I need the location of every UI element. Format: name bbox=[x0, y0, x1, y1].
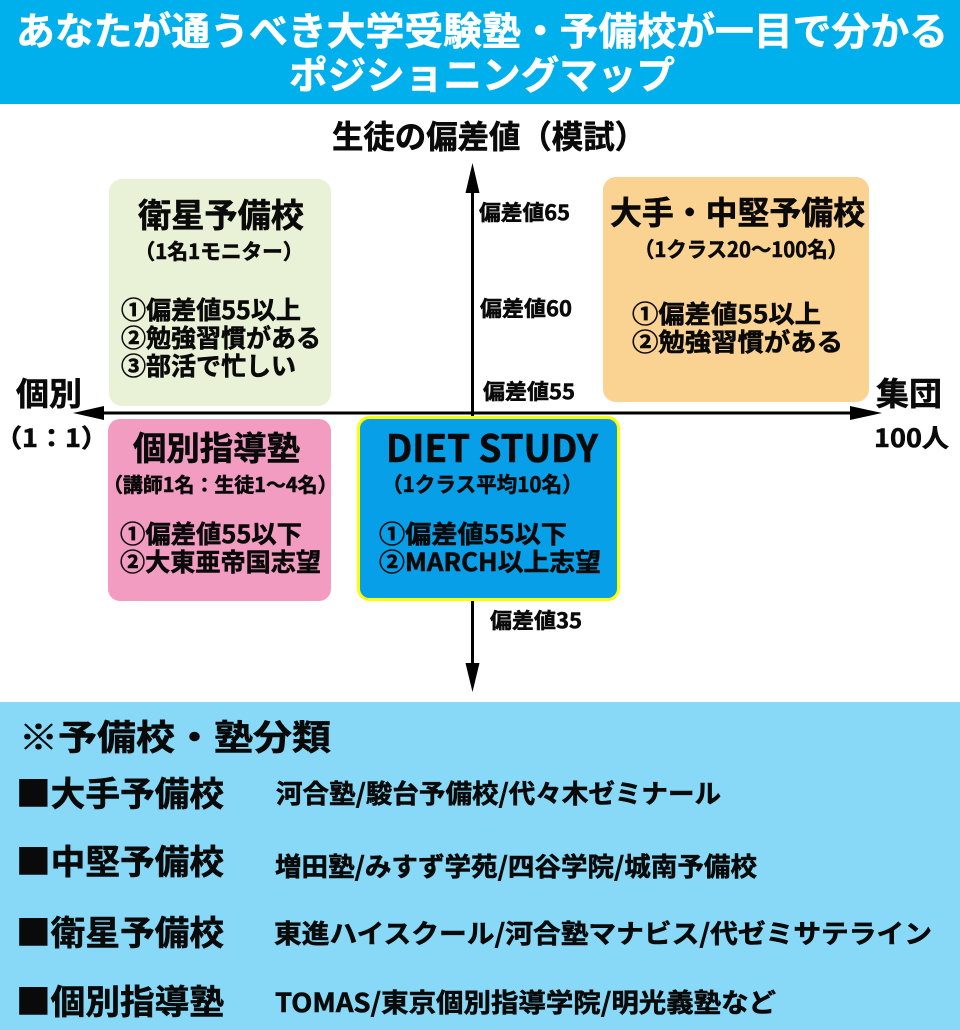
panel: major and mid-size prep schools: （1クラス20～100名） bbox=[634, 234, 848, 264]
panel: DIET STUDY: ②MARCH以上志望 bbox=[379, 543, 601, 579]
deviation scale labels: 偏差値55 bbox=[483, 376, 575, 406]
panel: DIET STUDY bbox=[358, 418, 618, 600]
row: individual tutoring schools bbox=[16, 975, 776, 1024]
row: major prep schools bbox=[16, 767, 721, 816]
panel: individual tutoring: ②大東亜帝国志望 bbox=[120, 543, 321, 579]
row: major prep schools: 河合塾/駿台予備校/代々木ゼミナール bbox=[276, 774, 721, 811]
row: mid-size prep schools bbox=[16, 835, 757, 884]
panel: individual tutoring: 個別指導塾 bbox=[133, 422, 300, 470]
panel: major and mid-size prep schools bbox=[603, 177, 869, 402]
vertical axis arrow bbox=[466, 163, 480, 692]
panel: classification list bbox=[0, 702, 960, 1030]
title banner: ポジショニングマップ bbox=[289, 45, 675, 101]
panel: major and mid-size prep schools: 大手・中堅予備校 bbox=[610, 188, 865, 234]
panel: individual tutoring bbox=[103, 419, 338, 601]
panel: DIET STUDY: （1クラス平均10名） bbox=[382, 469, 583, 499]
row: satellite prep schools bbox=[16, 906, 932, 955]
panel: satellite prep school bbox=[109, 179, 331, 406]
deviation scale labels: 偏差値60 bbox=[480, 293, 572, 323]
right axis label: 100人 bbox=[874, 419, 949, 455]
vertical axis title: 生徒の偏差値（模試） bbox=[332, 112, 646, 158]
deviation scale labels: 偏差値35 bbox=[490, 605, 582, 635]
classification heading: ※予備校・塾分類 bbox=[19, 710, 331, 761]
panel: DIET STUDY: ①偏差値55以下 bbox=[379, 515, 567, 551]
title banner bbox=[0, 0, 960, 104]
deviation scale labels: 偏差値65 bbox=[479, 197, 570, 227]
panel: satellite prep school: ①偏差値55以上 bbox=[121, 291, 301, 327]
panel: satellite prep school: 衛星予備校 bbox=[138, 189, 304, 237]
horizontal axis arrow bbox=[73, 406, 882, 420]
panel: individual tutoring: （講師1名：生徒1～4名） bbox=[103, 469, 338, 498]
right axis label: 集団 bbox=[876, 369, 942, 415]
row: satellite prep schools: ■衛星予備校 bbox=[16, 906, 224, 955]
panel: satellite prep school: ②勉強習慣がある bbox=[121, 319, 321, 355]
panel: satellite prep school: ③部活で忙しい bbox=[121, 347, 296, 383]
right axis label bbox=[874, 369, 949, 455]
panel: individual tutoring: ①偏差値55以下 bbox=[120, 515, 302, 551]
panel: major and mid-size prep schools: ①偏差値55以上 bbox=[632, 295, 821, 331]
row: individual tutoring schools: ■個別指導塾 bbox=[16, 975, 224, 1024]
deviation scale labels bbox=[479, 197, 582, 635]
row: major prep schools: ■大手予備校 bbox=[16, 767, 224, 816]
row: satellite prep schools: 東進ハイスクール/河合塾マナビス/代ゼミサテライン bbox=[274, 914, 932, 951]
row: mid-size prep schools: ■中堅予備校 bbox=[16, 835, 224, 884]
row: mid-size prep schools: 増田塾/みすず学苑/四谷学院/城南予備校 bbox=[275, 847, 757, 884]
row: individual tutoring schools: TOMAS/東京個別指導学院/明光義塾など bbox=[275, 983, 776, 1020]
title banner: あなたが通うべき大学受験塾・予備校が一目で分かる bbox=[16, 1, 948, 57]
left axis label: 個別 bbox=[16, 369, 82, 415]
panel: major and mid-size prep schools: ②勉強習慣がある bbox=[632, 323, 843, 359]
left axis label bbox=[0, 369, 108, 455]
panel: DIET STUDY: DIET STUDY bbox=[386, 418, 599, 473]
panel: satellite prep school: （1名1モニター） bbox=[134, 236, 304, 266]
